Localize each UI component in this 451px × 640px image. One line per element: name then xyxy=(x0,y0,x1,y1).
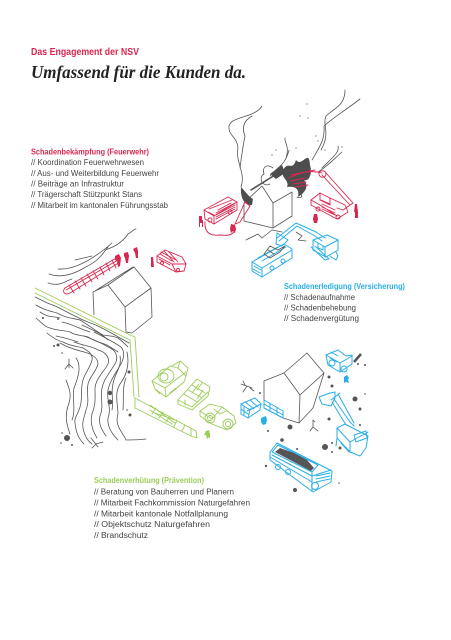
blue excavator large xyxy=(319,392,368,456)
text block: Schadenverhütung: // Brandschutz xyxy=(94,531,148,540)
blue truck xyxy=(252,244,292,277)
red car xyxy=(157,250,186,272)
branches xyxy=(65,359,103,448)
text block: Schadenbekämpfung xyxy=(31,148,169,210)
river xyxy=(35,297,146,444)
text block: Schadenverhütung: // Mitarbeit Fachkommission Naturgefahren xyxy=(94,498,250,508)
theodolite xyxy=(310,420,318,431)
protection wall lines xyxy=(35,288,139,397)
text block: Schadenerledigung: // Schadenaufnahme xyxy=(284,293,356,302)
rubble slide xyxy=(64,257,120,294)
blue dump truck xyxy=(270,443,332,492)
loader blade xyxy=(354,354,361,362)
water jet xyxy=(289,170,322,187)
cement mixer xyxy=(152,361,188,397)
damaged house xyxy=(264,353,324,423)
blue loader xyxy=(326,350,352,372)
smoke lines xyxy=(229,90,360,187)
house 2 xyxy=(93,267,152,333)
ladder truck xyxy=(311,171,353,219)
flames xyxy=(241,158,311,205)
text block: Schadenverhütung: // Beratung von Bauherren und Planern xyxy=(94,488,234,496)
slope lines xyxy=(48,229,136,284)
kicker: Das Engagement der NSV xyxy=(31,46,139,58)
burning house xyxy=(244,170,292,228)
firefighters left xyxy=(199,202,250,233)
tractor xyxy=(200,404,236,430)
text block: Schadenbekämpfung: // Trägerschaft Stützpunkt Stans xyxy=(31,190,142,199)
debris dots left xyxy=(42,317,132,446)
text block: Schadenerledigung: // Schadenbehebung xyxy=(284,304,356,312)
brick wall xyxy=(135,398,197,438)
text block: Schadenbekämpfung: // Aus- und Weiterbildung Feuerwehr xyxy=(31,169,159,178)
text block: Schadenbekämpfung: // Koordination Feuerwehrwesen xyxy=(31,158,144,167)
house bricks xyxy=(264,400,283,418)
fire engine left xyxy=(204,197,237,235)
truck debris xyxy=(264,246,285,258)
brick pile blue xyxy=(241,398,261,418)
text block: Schadenbekämpfung: // Mitarbeit im kantonalen Führungsstab xyxy=(31,201,169,210)
broken branch xyxy=(241,381,254,392)
truck load xyxy=(275,448,314,471)
text block: Schadenverhütung: // Mitarbeit kantonale Notfallplanung xyxy=(94,510,228,518)
text block: Schadenverhütung: // Objektschutz Naturgefahren xyxy=(94,520,210,529)
text block: Schadenverhütung xyxy=(94,476,250,540)
firefighters right xyxy=(313,204,358,223)
bricks xyxy=(178,379,210,410)
title: Umfassend für die Kunden da. xyxy=(31,62,246,82)
text block: Schadenbekämpfung: Schadenbekämpfung (Feuerwehr) xyxy=(31,148,149,156)
figure green xyxy=(204,430,210,439)
debris dots right xyxy=(259,363,366,492)
text block: Schadenbekämpfung: // Beiträge an Infrastruktur xyxy=(31,180,124,188)
text block: Schadenerledigung: // Schadenvergütung xyxy=(284,314,359,323)
ground cracks xyxy=(246,230,306,241)
sparks xyxy=(271,103,343,156)
blue figures xyxy=(261,375,349,425)
text block: Schadenerledigung: Schadenerledigung (Versicherung) xyxy=(284,282,405,291)
text block: Schadenerledigung xyxy=(284,282,405,323)
text block: Schadenverhütung: Schadenverhütung (Prävention) xyxy=(94,476,204,485)
people red xyxy=(115,247,154,267)
small smoke cloud xyxy=(261,166,302,198)
blue excavator xyxy=(276,223,338,260)
